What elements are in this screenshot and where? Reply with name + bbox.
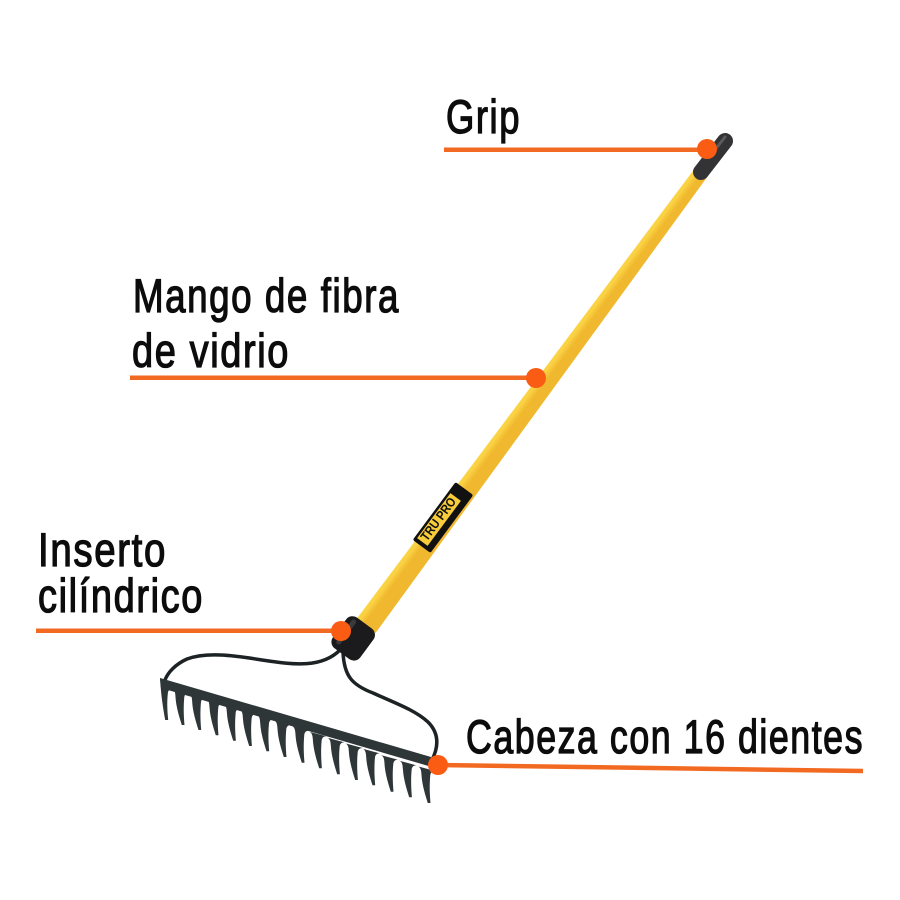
brand label <box>413 482 473 553</box>
leader line: head <box>438 765 863 771</box>
ferrule <box>328 613 378 664</box>
dot: handle <box>526 368 546 388</box>
label: handle: Mango de fibra <box>133 269 400 322</box>
dot: grip <box>697 139 717 159</box>
leader line: handle <box>130 376 536 380</box>
leader line: insert <box>36 628 341 633</box>
callout: handle <box>130 269 546 388</box>
label: insert: Inserto <box>38 523 167 576</box>
dot: insert <box>331 621 351 641</box>
fiberglass handle <box>356 166 709 633</box>
label: insert <box>38 523 204 622</box>
brand label: TRU PRO <box>417 494 459 543</box>
rake tool <box>160 137 725 803</box>
grip <box>701 137 725 172</box>
label: grip: Grip <box>446 90 521 143</box>
label: handle <box>132 269 400 377</box>
leader line: grip <box>444 148 707 152</box>
callout: grip <box>444 90 717 159</box>
callout: insert <box>36 523 351 641</box>
label: handle: de vidrio <box>132 324 290 377</box>
dot: head <box>428 755 448 775</box>
callout: head <box>428 710 864 775</box>
label: insert: cilíndrico <box>38 569 204 622</box>
rake head with 16 teeth <box>160 650 437 803</box>
